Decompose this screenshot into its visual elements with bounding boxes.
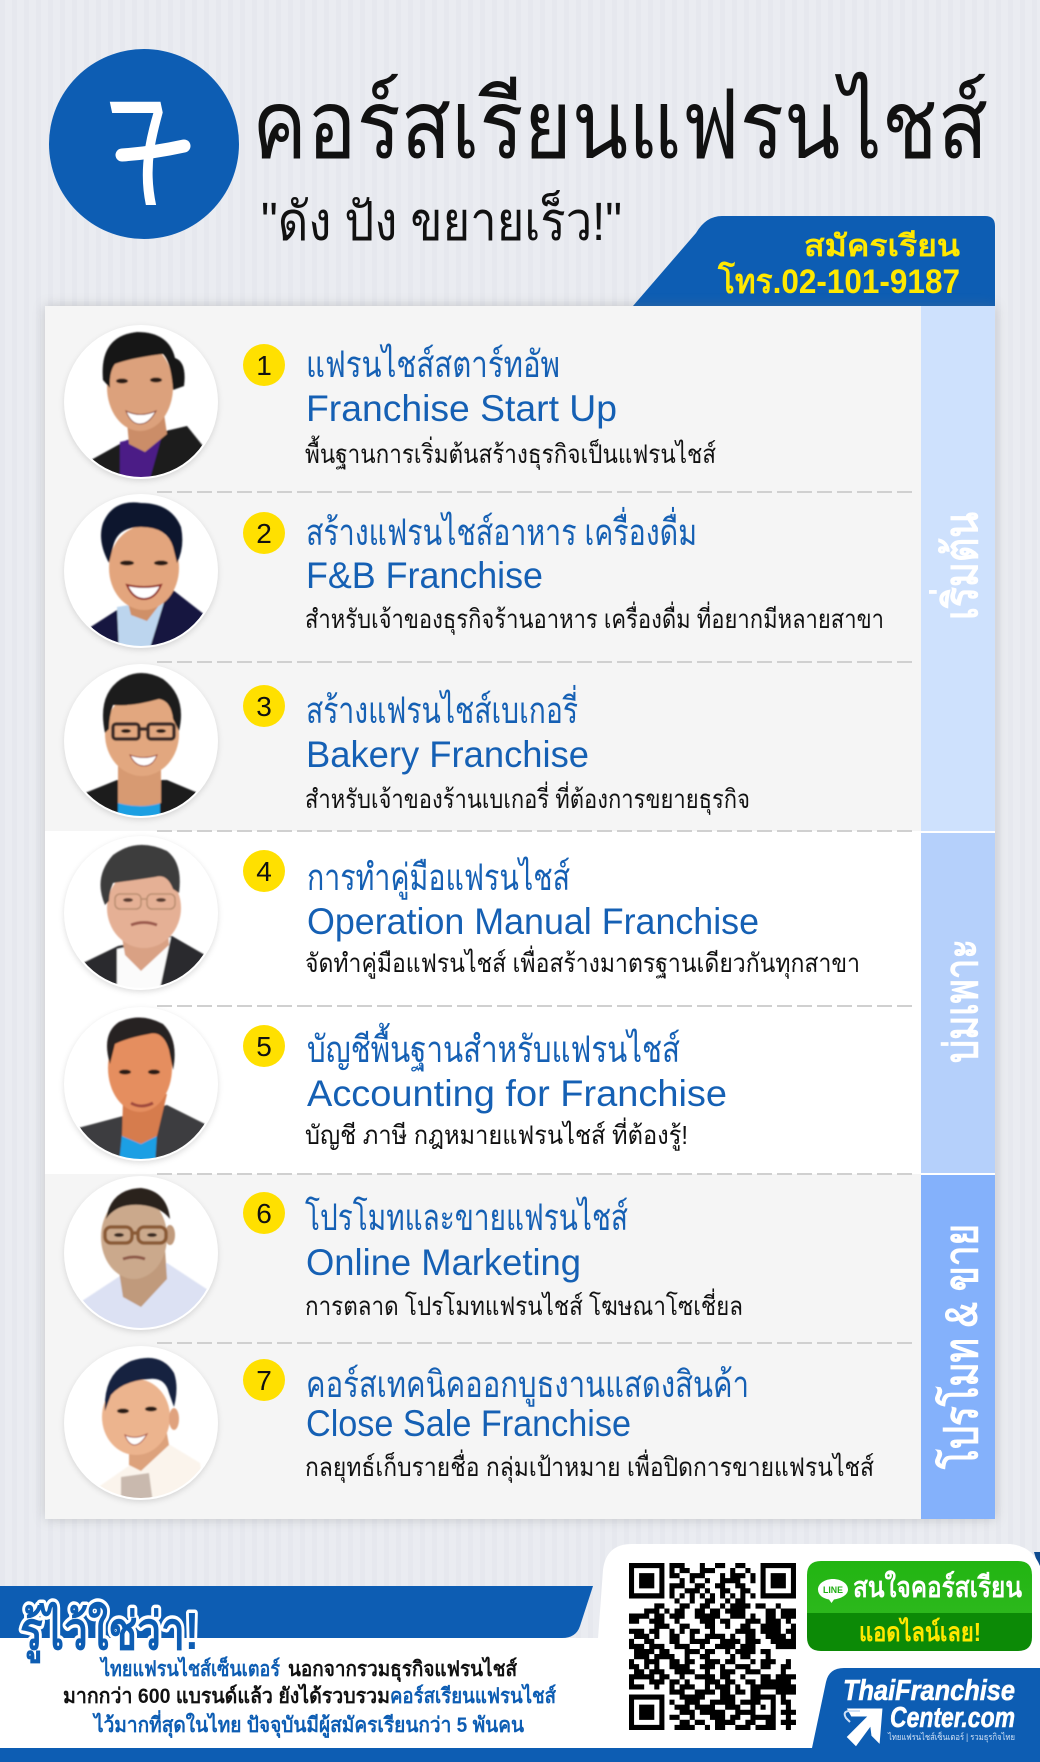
add line label: แอดไลน์เลย! [859, 1616, 981, 1647]
badge 5 [243, 1025, 285, 1067]
phone tab [633, 216, 995, 306]
portrait 4 [64, 836, 218, 993]
thai title 3: สร้างแฟรนไชส์เบเกอรี่ [306, 684, 578, 731]
english title 7: Close Sale Franchise [306, 1403, 631, 1444]
description 3: สำหรับเจ้าของร้านเบเกอรี่ ที่ต้องการขยายธุรกิจ [305, 781, 750, 815]
logo: ThaiFranchise [843, 1675, 1015, 1707]
logo: ไทยแฟรนไชส์เซ็นเตอร์ | รวมธุรกิจไทย [887, 1730, 1015, 1743]
badge 7 [243, 1359, 285, 1401]
badge 2 [243, 512, 285, 554]
thai title 1: แฟรนไชส์สตาร์ทอัพ [306, 343, 560, 385]
band: beginner: เริ่มต้น [929, 512, 987, 620]
qr code [629, 1566, 796, 1727]
thai title 5: บัญชีพื้นฐานสำหรับแฟรนไชส์ [307, 1022, 680, 1072]
portrait 3 [64, 664, 218, 821]
footer band [0, 1586, 1040, 1762]
band: promote and sell [921, 1175, 995, 1519]
thai title 2: สร้างแฟรนไชส์อาหาร เครื่องดื่ม [306, 506, 697, 553]
badge 6: 6 [256, 1198, 272, 1229]
thai title 7: คอร์สเทคนิคออกบูธงานแสดงสินค้า [306, 1364, 749, 1407]
band: incubate: บ่มเพาะ [935, 939, 987, 1063]
badge 4: 4 [256, 856, 272, 887]
course 3 [64, 664, 750, 821]
course 2 [64, 494, 884, 651]
description 6: การตลาด โปรโมทแฟรนไชส์ โฆษณาโซเชี่ยล [305, 1288, 743, 1321]
course 4 [64, 836, 860, 993]
logo [812, 1668, 1040, 1748]
did you know heading: รู้ไว้ใช่ว่า! [20, 1601, 199, 1664]
badge 4 [243, 850, 285, 892]
description 1: พื้นฐานการเริ่มต้นสร้างธุรกิจเป็นแฟรนไชส์ [305, 435, 716, 470]
panel: course list [45, 306, 995, 1519]
band: beginner [921, 306, 995, 831]
line button [807, 1561, 1032, 1651]
portrait 2 [64, 494, 218, 651]
badge 1: 1 [256, 350, 272, 381]
description 5: บัญชี ภาษี กฎหมายแฟรนไชส์ ที่ต้องรู้! [305, 1117, 688, 1151]
course 1 [64, 325, 716, 482]
portrait 5 [64, 1007, 218, 1164]
badge 3 [243, 685, 285, 727]
description 2: สำหรับเจ้าของธุรกิจร้านอาหาร เครื่องดื่ม ที่อยากมีหลายสาขา [305, 601, 884, 635]
register label: สมัครเรียน [804, 230, 961, 263]
number seven badge: 7 [97, 71, 195, 238]
icon: line chat bubble [818, 1579, 848, 1603]
paragraph: นอกจากรวมธุรกิจแฟรนไชส์ [288, 1656, 517, 1683]
paragraph: คอร์สเรียนแฟรนไชส์ [390, 1683, 556, 1708]
course 5 [64, 1007, 727, 1164]
badge 1 [243, 344, 285, 386]
course 7 [64, 1346, 874, 1503]
portrait 7 [64, 1346, 218, 1503]
thai title 6: โปรโมทและขายแฟรนไชส์ [305, 1196, 628, 1238]
english title 6: Online Marketing [306, 1242, 581, 1283]
subtitle: "ดัง ปัง ขยายเร็ว!" [261, 190, 622, 252]
english title 3: Bakery Franchise [306, 734, 589, 775]
badge 3: 3 [256, 691, 272, 722]
paragraph: มากกว่า 600 แบรนด์แล้ว ยังได้รวบรวม [63, 1683, 390, 1708]
paragraph [63, 1655, 556, 1739]
badge 7: 7 [256, 1365, 272, 1396]
course 6 [64, 1176, 743, 1333]
contact card [590, 1544, 1040, 1748]
description 7: กลยุทธ์เก็บรายชื่อ กลุ่มเป้าหมาย เพื่อปิดการขายแฟรนไชส์ [305, 1449, 874, 1483]
badge 5: 5 [256, 1031, 272, 1062]
phone number: โทร.02-101-9187 [717, 261, 960, 301]
icon: line chat bubble: LINE [823, 1585, 843, 1595]
band: incubate [921, 833, 995, 1173]
english title 4: Operation Manual Franchise [307, 901, 759, 942]
paragraph: ไว้มากที่สุดในไทย ปัจจุบันมีผู้สมัครเรียนกว่า 5 พันคน [92, 1709, 525, 1739]
badge 2: 2 [256, 518, 272, 549]
english title 1: Franchise Start Up [306, 388, 617, 429]
paragraph: ไทยแฟรนไชส์เซ็นเตอร์ [99, 1655, 281, 1681]
icon: arrow [845, 1708, 883, 1747]
description 4: จัดทำคู่มือแฟรนไชส์ เพื่อสร้างมาตรฐานเดียวกันทุกสาขา [305, 945, 860, 979]
number seven badge [49, 49, 239, 239]
band: promote and sell: โปรโมท & ขาย [934, 1224, 987, 1470]
badge 6 [243, 1192, 285, 1234]
thai title 4: การทำคู่มือแฟรนไชส์ [307, 856, 570, 900]
english title 5: Accounting for Franchise [307, 1073, 727, 1114]
english title 2: F&B Franchise [306, 555, 543, 596]
portrait 1 [64, 325, 218, 482]
portrait 6 [64, 1176, 218, 1333]
